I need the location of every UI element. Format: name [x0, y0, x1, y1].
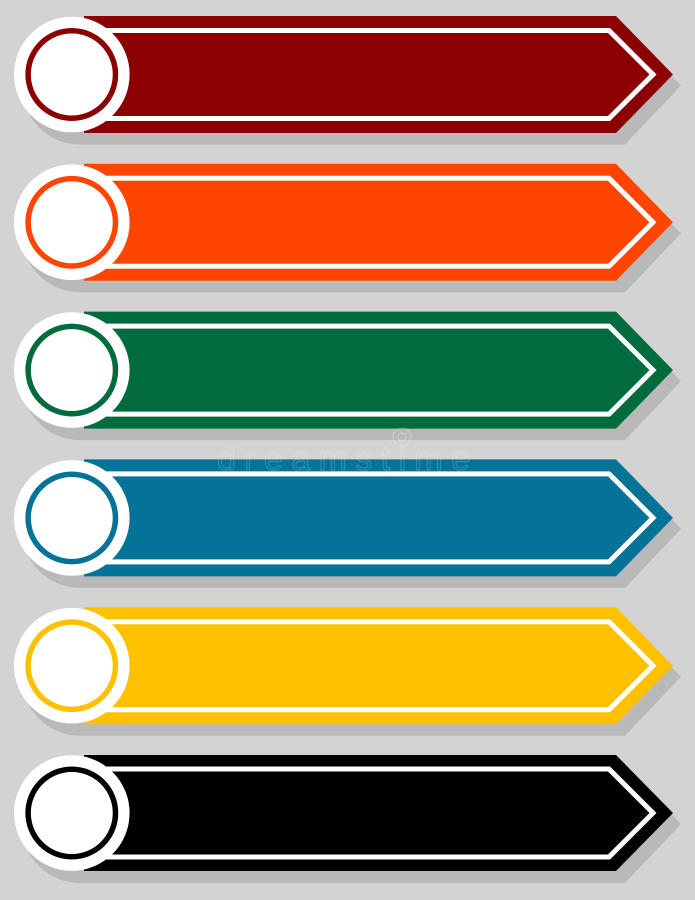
banner: yellow — [14, 607, 681, 736]
watermark: dreamstime — [217, 440, 470, 478]
banner: green — [14, 312, 681, 440]
banner: orange — [14, 164, 681, 292]
banner: dark red — [14, 16, 681, 144]
banner: blue — [14, 459, 681, 588]
banner: black — [14, 755, 681, 883]
